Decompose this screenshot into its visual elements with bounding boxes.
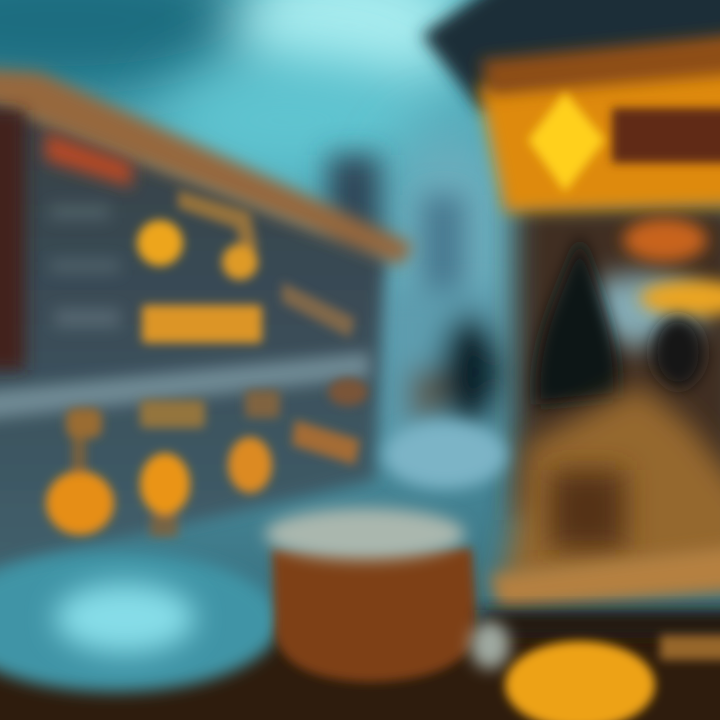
distant towers (328, 155, 500, 440)
yellow foreground blob (505, 641, 655, 720)
sign dark inlay (612, 108, 720, 163)
second figure head (652, 316, 704, 388)
awning glow (640, 280, 720, 316)
silhouette figure (535, 235, 618, 405)
yellow icons upper (137, 190, 355, 343)
yellow hanging sign (478, 45, 720, 212)
table disc (0, 552, 280, 692)
red sign label (45, 132, 132, 187)
cup (272, 548, 478, 682)
yellow icons lower (46, 378, 368, 537)
signboard panel (0, 68, 414, 570)
pale reflection (470, 621, 510, 669)
text lines (50, 205, 120, 326)
seated figure (500, 385, 720, 590)
signboard roof (0, 68, 414, 265)
cup rim (265, 508, 465, 560)
pale water patch (383, 421, 507, 489)
sign diamond emblem (528, 92, 605, 192)
shelf band (0, 352, 370, 420)
ground water and foreground (0, 421, 720, 720)
lantern (623, 218, 707, 262)
dark eave (422, 0, 720, 110)
right building structure (422, 0, 720, 590)
left post (0, 110, 25, 370)
right shelf bands (490, 545, 720, 608)
